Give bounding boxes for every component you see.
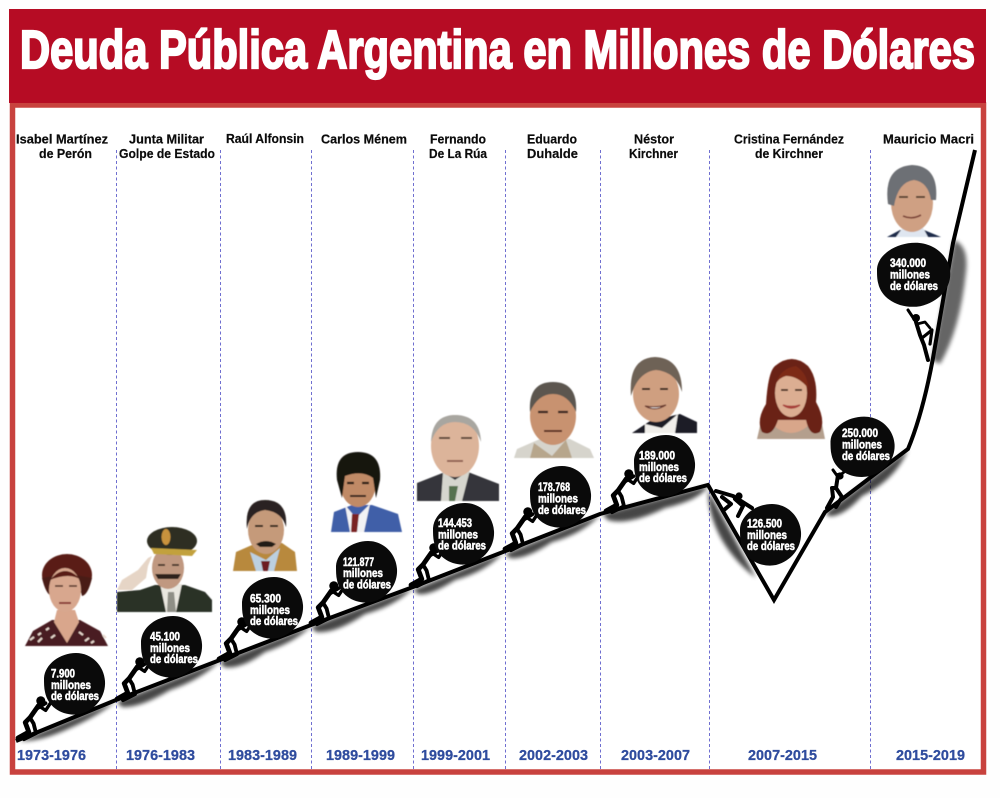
period labels: 1976-1983 — [126, 748, 195, 764]
boulder: 144.453: de dólares — [438, 540, 486, 552]
debt line shadow — [20, 450, 908, 741]
boulder: 126.500 — [740, 504, 801, 566]
period labels: 1989-1999 — [326, 748, 395, 764]
boulder: 250.000: 250.000 — [842, 427, 878, 440]
boulder: 121.877: millones — [343, 567, 383, 580]
boulder: 121.877: 121.877 — [343, 556, 374, 569]
boulder: 250.000: de dólares — [842, 450, 890, 463]
portrait: Raúl Alfonsin — [233, 500, 297, 571]
boulder: 189.000 — [634, 435, 695, 497]
boulder: 340.000: 340.000 — [890, 257, 926, 270]
boulder: 7.900: 7.900 — [51, 668, 75, 680]
portrait: Carlos Ménem — [331, 452, 402, 532]
boulder: 340.000: millones — [890, 268, 930, 282]
president names: de Perón — [39, 146, 92, 161]
period labels: 2002-2003 — [519, 748, 588, 764]
period labels: 1973-1976 — [17, 748, 86, 764]
boulder: 45.100: de dólares — [150, 653, 198, 666]
portrait: Isabel Martínez de Perón — [25, 554, 108, 646]
boulder: 250.000 — [830, 417, 895, 477]
figure: descending climber — [716, 491, 752, 516]
boulder: 45.100: 45.100 — [150, 630, 180, 644]
period labels: 2015-2019 — [896, 748, 965, 764]
president names: Cristina Fernández — [734, 132, 844, 146]
boulder: 7.900: de dólares — [51, 690, 99, 703]
boulder: 144.453 — [433, 503, 494, 565]
boulder: 121.877: de dólares — [343, 578, 391, 592]
boulder: 126.500: de dólares — [747, 540, 795, 553]
portrait: Fernando De La Rúa — [417, 415, 499, 501]
boulder: 65.300: 65.300 — [250, 592, 281, 606]
president names: Fernando — [430, 132, 486, 146]
president names: Carlos Ménem — [321, 132, 407, 146]
president names: de Kirchner — [755, 146, 823, 161]
president names: Duhalde — [527, 146, 578, 161]
president names: Golpe de Estado — [119, 146, 215, 161]
boulder: 7.900: millones — [51, 679, 91, 692]
debt line — [16, 150, 975, 741]
portrait: Néstor Kirchner — [631, 357, 697, 433]
boulder: 250.000: millones — [842, 438, 882, 452]
period labels: 2007-2015 — [748, 748, 817, 764]
boulder: 45.100 — [141, 616, 202, 678]
period labels — [17, 748, 965, 764]
boulder: 178.768: millones — [538, 492, 578, 506]
boulder: 189.000: millones — [639, 461, 679, 474]
boulder: 121.877 — [336, 541, 397, 603]
portrait: Eduardo Duhalde — [514, 382, 594, 458]
president names: Junta Militar — [129, 132, 204, 146]
boulder: 189.000: 189.000 — [639, 450, 675, 462]
president names: Eduardo — [527, 132, 577, 146]
boulder: 65.300: millones — [250, 604, 290, 617]
president names: Isabel Martínez — [16, 132, 108, 146]
Macri slope shadow — [932, 240, 966, 364]
portrait: Mauricio Macri — [887, 165, 941, 237]
president names: Raúl Alfonsin — [226, 131, 304, 146]
president names: De La Rúa — [429, 146, 488, 161]
boulder: 65.300: de dólares — [250, 615, 298, 628]
figure: rebound climber — [827, 470, 844, 508]
president names: Néstor — [634, 132, 674, 146]
president names: Mauricio Macri — [883, 132, 974, 146]
boulder: 340.000: de dólares — [890, 280, 938, 293]
boulder: 65.300 — [242, 577, 303, 639]
period labels: 2003-2007 — [621, 748, 690, 764]
boulder: 178.768: 178.768 — [538, 481, 570, 494]
president names: Kirchner — [629, 146, 678, 161]
boulder: 45.100: millones — [150, 642, 190, 655]
period labels: 1983-1989 — [228, 748, 297, 764]
figure: steep climber — [908, 310, 932, 360]
portrait: Cristina Fernández de Kirchner — [757, 359, 825, 439]
boulder: 189.000: de dólares — [639, 472, 687, 485]
president names — [16, 131, 974, 161]
boulder: 340.000 — [877, 243, 950, 307]
boulder: 178.768: de dólares — [538, 504, 586, 517]
climbing figures — [18, 310, 932, 739]
boulder: 144.453: 144.453 — [438, 517, 472, 530]
period labels: 1999-2001 — [421, 748, 490, 764]
title banner — [9, 9, 986, 103]
boulder: 126.500: millones — [747, 529, 787, 542]
boulder: 144.453: millones — [438, 528, 478, 542]
portrait: Junta Militar — [117, 527, 212, 612]
boulder: 178.768 — [530, 466, 591, 528]
boulder: 7.900 — [44, 653, 105, 715]
boulder: 126.500: 126.500 — [747, 518, 782, 530]
